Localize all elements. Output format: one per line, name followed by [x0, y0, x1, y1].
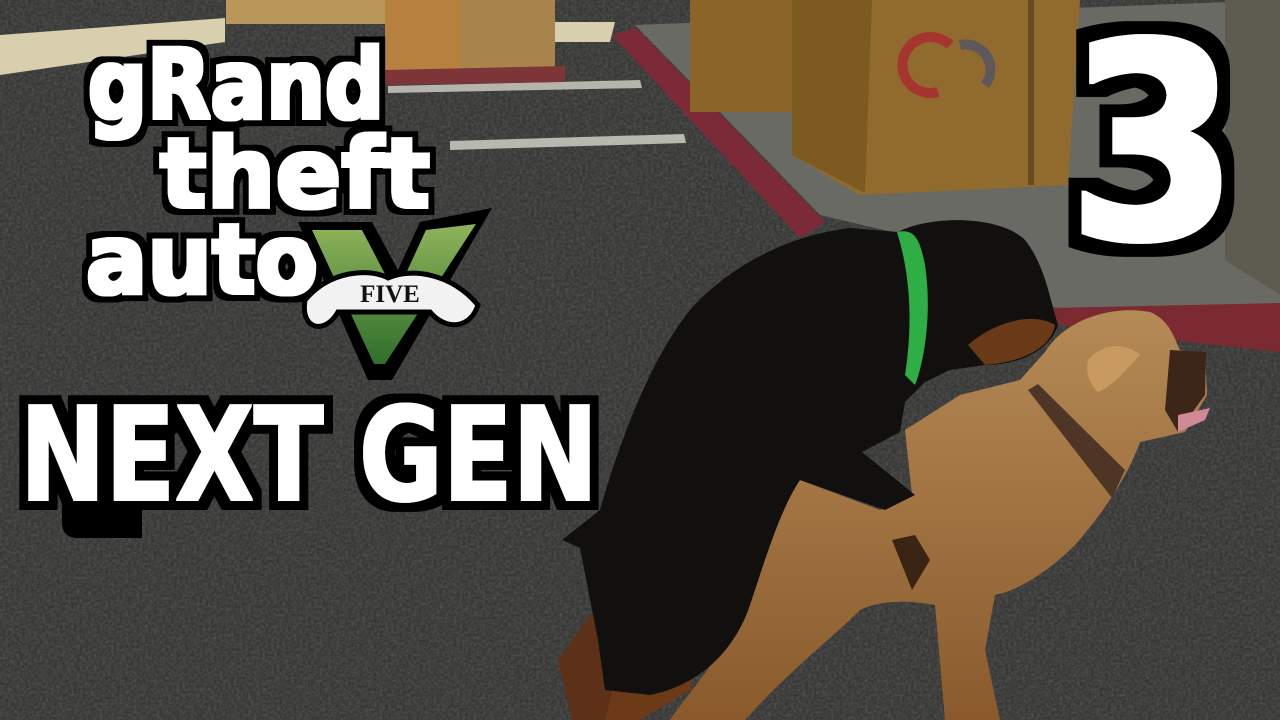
logo word: theft: theft [160, 118, 430, 230]
heading: next gen: NEXT GEN [20, 379, 598, 531]
paw marking [892, 535, 930, 590]
rottweiler muzzle marking [968, 319, 1055, 365]
logo word: auto: auto [86, 204, 318, 316]
dog tongue [1178, 408, 1210, 432]
tail of the N in next gen [62, 480, 142, 538]
logo word: grand: gRand [88, 29, 384, 141]
tan dog [670, 310, 1210, 720]
rear legs of black dog [558, 610, 700, 720]
dog muzzle [1165, 350, 1206, 432]
black dog [562, 220, 1058, 695]
logo banner text: FIVE [360, 281, 420, 308]
crate logo [902, 37, 990, 93]
logo green V [298, 208, 492, 380]
green collar [897, 231, 928, 385]
dog ear [1087, 346, 1140, 392]
sunlit patches and road markings [0, 18, 686, 150]
logo: Grand Theft Auto V [86, 29, 492, 380]
sidewalk [635, 0, 1280, 310]
background crates right [690, 0, 1280, 295]
background crates left [226, 0, 565, 85]
leather collar [1028, 384, 1125, 498]
red curb [612, 28, 1280, 352]
logo banner [304, 273, 478, 326]
